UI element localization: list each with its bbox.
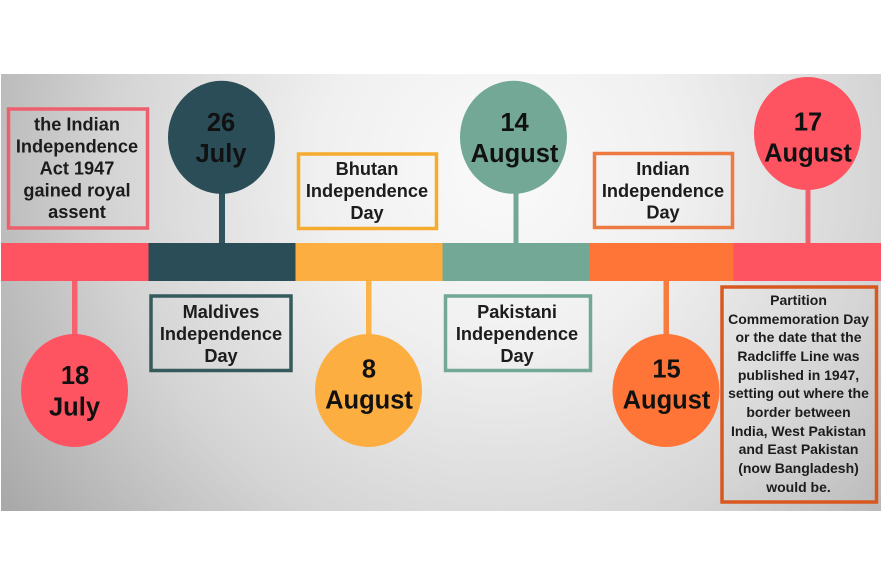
- event box: Indian Independence Act: Act 1947: [40, 158, 114, 178]
- marker: 8 August: [315, 281, 422, 447]
- marker: 14 August: August: [471, 140, 559, 168]
- event box: Partition Commemoration Day: Commemoration Day: [728, 311, 869, 327]
- event box: Indian Independence Act: the Indian: [34, 114, 120, 134]
- event box: Partition Commemoration Day: India, West Pakistan: [731, 423, 866, 439]
- background panel: [1, 74, 881, 511]
- event box: Bhutan Independence Day: Day: [350, 203, 385, 223]
- event box: Partition Commemoration Day: would be.: [765, 479, 831, 495]
- event box: Maldives Independence Day: Independence: [160, 324, 282, 344]
- marker: 17 August: 17: [794, 108, 822, 136]
- event box: Pakistani Independence Day: [446, 296, 590, 370]
- event box: Partition Commemoration Day: and East Pakistan: [739, 441, 858, 457]
- marker: 17 August: August: [764, 140, 852, 168]
- marker: 26 July: 26: [207, 109, 235, 137]
- marker: 8 August: August: [325, 386, 413, 414]
- event box: Maldives Independence Day: [151, 296, 291, 370]
- marker: 18 July: [21, 281, 128, 447]
- marker: 15 August: [612, 281, 720, 447]
- event box: Pakistani Independence Day: Pakistani: [477, 302, 557, 322]
- marker: 14 August: [460, 81, 567, 243]
- event box: Indian Independence Act: gained royal: [23, 180, 131, 200]
- marker: 18 July: 18: [61, 362, 89, 390]
- timeline bar: [1, 243, 881, 281]
- event box: Partition Commemoration Day: border between: [746, 404, 851, 420]
- event box: Partition Commemoration Day: or the date that the: [735, 329, 862, 345]
- event box: Maldives Independence Day: Maldives: [183, 302, 259, 322]
- event box: Partition Commemoration Day: (now Bangladesh): [738, 460, 859, 476]
- marker: 15 August: 15: [652, 356, 681, 384]
- marker: 26 July: [168, 81, 275, 243]
- event box: Indian Independence Act: Independence: [16, 136, 138, 156]
- event box: Partition Commemoration Day: setting out where the: [728, 385, 869, 401]
- event box: Indian Independence Day: Indian: [636, 159, 690, 179]
- marker: 26 July: July: [195, 140, 247, 168]
- event box: Pakistani Independence Day: Independence: [456, 324, 578, 344]
- event box: Indian Independence Act: [8, 109, 148, 228]
- event box: Indian Independence Act: assent: [48, 202, 106, 222]
- event box: Pakistani Independence Day: Day: [500, 346, 535, 366]
- marker: 14 August: 14: [500, 109, 529, 137]
- event box: Bhutan Independence Day: Bhutan: [336, 159, 398, 179]
- marker: 17 August: [754, 77, 861, 243]
- event box: Bhutan Independence Day: Independence: [306, 181, 428, 201]
- marker: 8 August: 8: [362, 356, 376, 384]
- event box: Partition Commemoration Day: Partition: [770, 292, 827, 308]
- marker: 18 July: July: [49, 394, 101, 422]
- event box: Partition Commemoration Day: Radcliffe Line was: [737, 348, 860, 364]
- event box: Partition Commemoration Day: [722, 287, 876, 502]
- event box: Indian Independence Day: Independence: [602, 181, 724, 201]
- marker: 15 August: August: [623, 386, 711, 414]
- event box: Indian Independence Day: Day: [646, 202, 681, 222]
- event box: Bhutan Independence Day: [298, 154, 436, 228]
- event box: Partition Commemoration Day: published in 1947,: [738, 367, 859, 383]
- event box: Indian Independence Day: [594, 154, 732, 228]
- event box: Maldives Independence Day: Day: [204, 346, 239, 366]
